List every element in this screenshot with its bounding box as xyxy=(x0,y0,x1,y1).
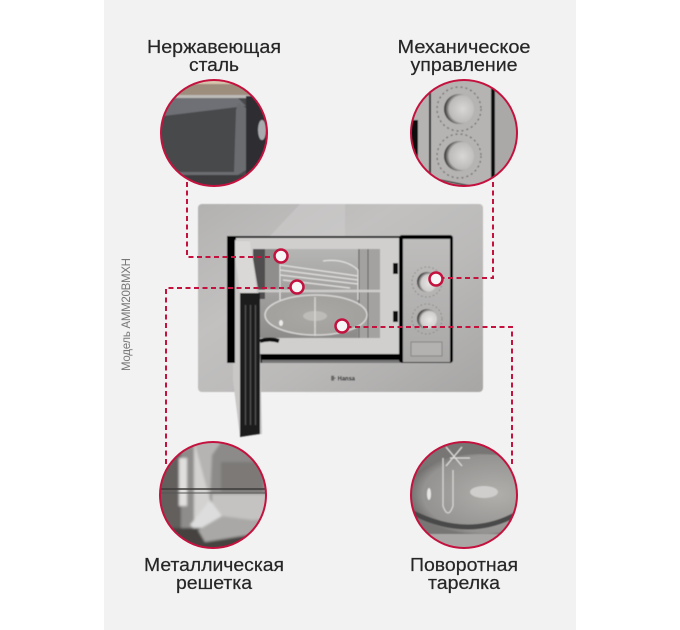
glass turntable xyxy=(265,295,367,335)
heading: Нержавеющая xyxy=(147,36,281,57)
model label: Модель AMM20BMXH xyxy=(121,258,133,371)
control panel xyxy=(399,235,453,363)
background panel xyxy=(104,0,576,630)
callout: metal rack: решетка xyxy=(176,572,253,593)
steel frame xyxy=(198,204,483,392)
microwave oven xyxy=(198,204,483,437)
oven cavity xyxy=(253,249,380,338)
wire rack xyxy=(253,260,380,300)
display window xyxy=(411,342,442,356)
callout: stainless steel xyxy=(147,36,281,191)
control knobs xyxy=(417,272,437,292)
open door xyxy=(233,240,262,437)
connector lines xyxy=(166,182,512,464)
callout: stainless steel: сталь xyxy=(189,54,239,75)
bottom door seal xyxy=(260,354,400,360)
door opening xyxy=(227,236,400,363)
detail photo xyxy=(412,81,516,185)
callout: metal rack xyxy=(144,438,284,593)
heading: Механическое xyxy=(398,36,530,57)
detail photo xyxy=(161,443,265,547)
heading: Поворотная xyxy=(410,554,518,575)
detail photo xyxy=(162,81,266,185)
callout: mechanical control xyxy=(398,36,530,191)
callout: turntable xyxy=(410,441,518,594)
door latches xyxy=(393,263,398,274)
callout: turntable: тарелка xyxy=(428,572,501,593)
detail photo xyxy=(412,443,516,547)
callout: mechanical control: управление xyxy=(410,54,518,75)
light reflection xyxy=(270,204,345,236)
brand logo: ⊪ Hansa xyxy=(331,374,355,382)
marker dots xyxy=(274,250,442,332)
heading: Металлическая xyxy=(144,554,284,575)
